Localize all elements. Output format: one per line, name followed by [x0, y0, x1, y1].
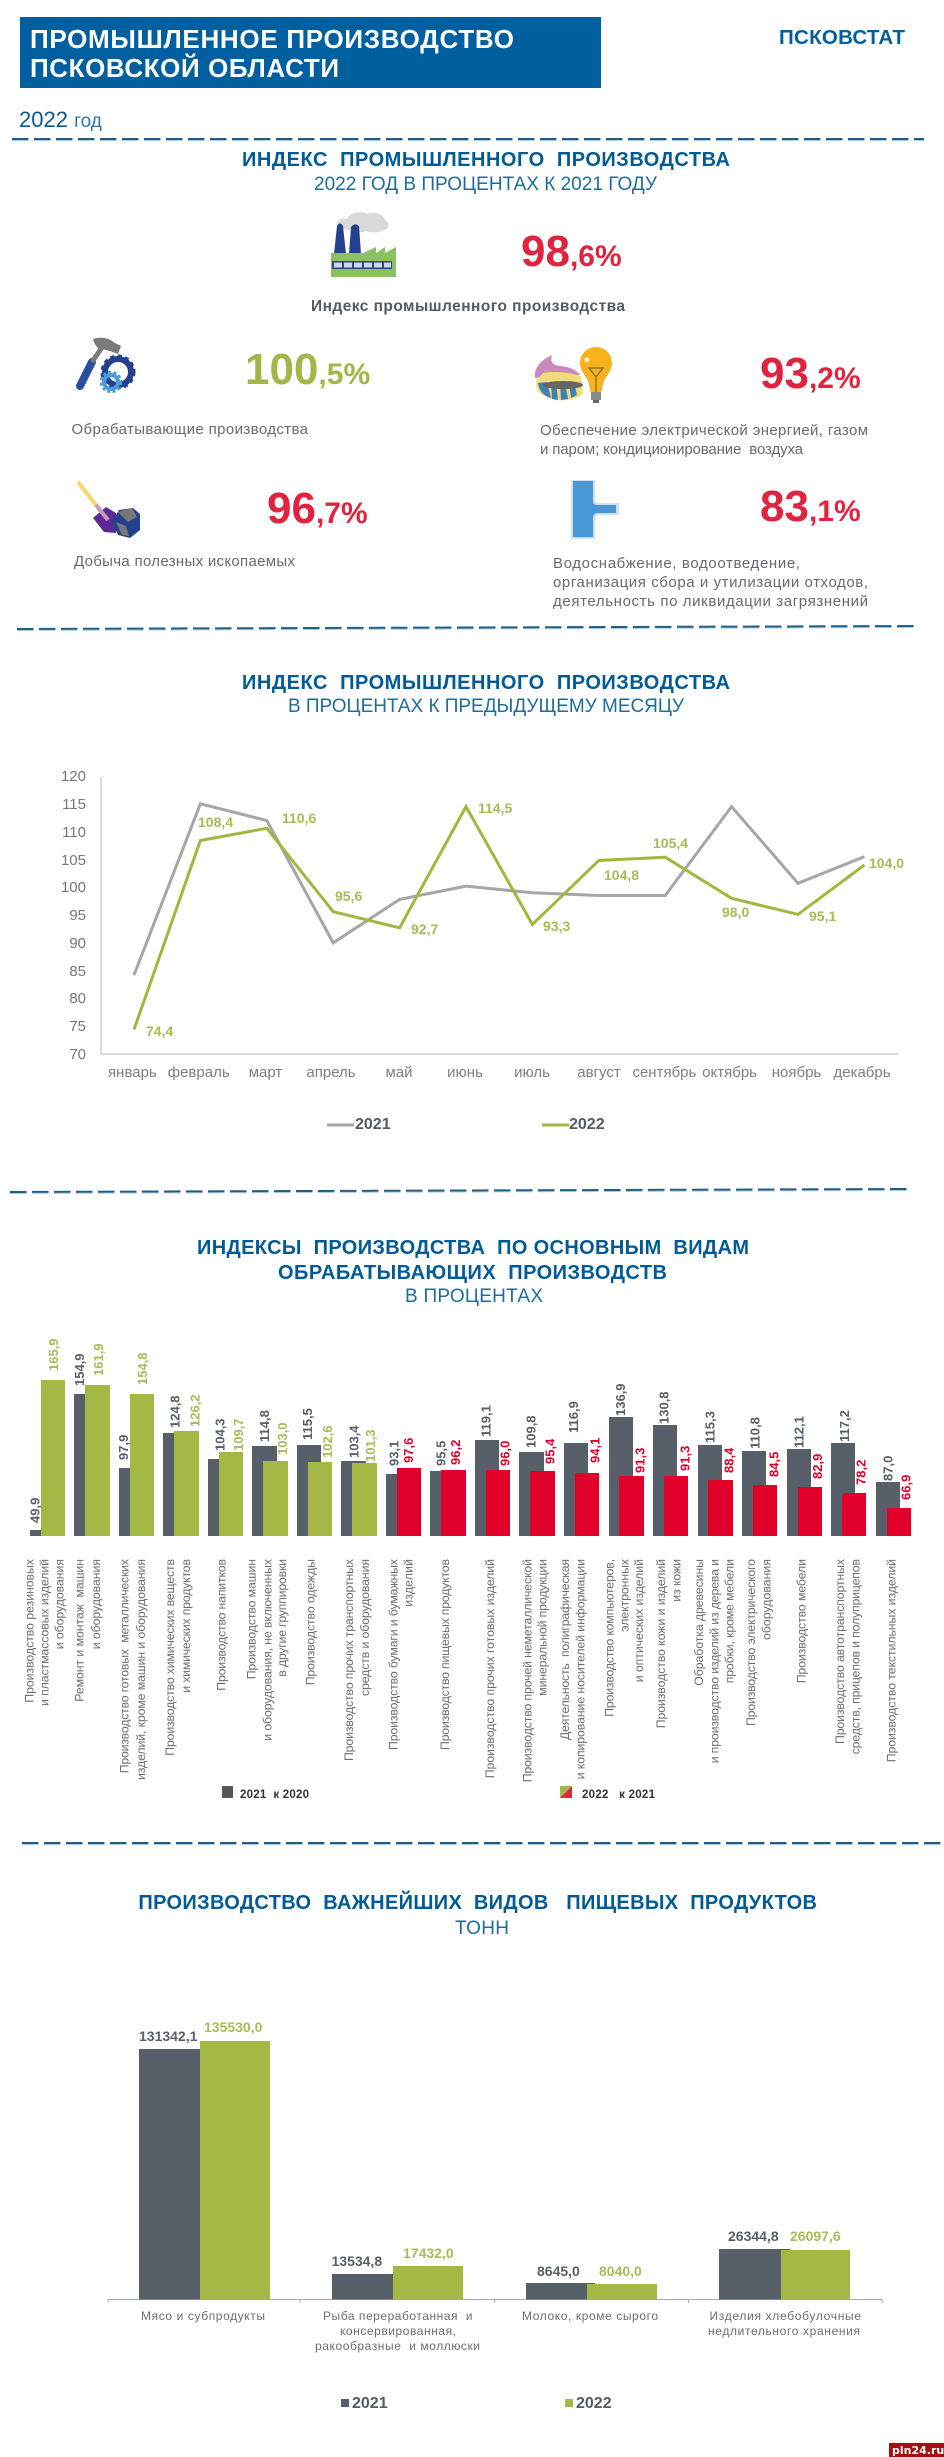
data labels: 2022: 92,7 [411, 921, 438, 937]
title banner: ПСКОВСКОЙ ОБЛАСТИ [30, 53, 339, 83]
bar values: 2021 to 2020: 114,8 [257, 1410, 272, 1442]
category labels: Производство кожи и изделий [654, 1559, 668, 1728]
category labels: Производство прочих готовых изделий [483, 1559, 497, 1778]
label: energy: Обеспечение электрической энергией, газом [540, 422, 868, 439]
category labels: Производство прочих транспортных [342, 1558, 356, 1761]
label: total index: Индекс промышленного производства [311, 298, 625, 315]
category labels: средств и оборудования [358, 1559, 372, 1696]
watermark: pln24.ru [892, 2444, 944, 2457]
x-axis labels: ноябрь [772, 1064, 821, 1081]
x-axis labels: апрель [306, 1064, 356, 1081]
icon: hammer and gears [80, 338, 134, 392]
panel: food production [108, 1890, 882, 2412]
y-axis labels: 105 [61, 852, 86, 869]
category labels: средств, прицепов и полуприцепов [849, 1559, 863, 1754]
category labels: Молоко, кроме сырого [522, 2309, 658, 2323]
heading: manufacturing types: ИНДЕКСЫ ПРОИЗВОДСТВА ПО ОСНОВНЫМ ВИДАМ [197, 1237, 749, 1259]
category labels: Производство готовых металлических [117, 1558, 131, 1773]
category labels: из кожи [670, 1559, 684, 1602]
bar values: 2021 to 2020: 115,3 [702, 1411, 718, 1443]
category labels: и химических продуктов [179, 1559, 193, 1693]
bar values: 2022 to 2021: 84,5 [766, 1452, 782, 1477]
category labels: Деятельность полиграфическая [558, 1559, 572, 1740]
y-axis labels: 85 [69, 963, 86, 980]
bar values: 2022 to 2021: 102,6 [320, 1425, 335, 1458]
panel: monthly index [61, 672, 904, 1133]
legend [222, 1786, 656, 1801]
panel: manufacturing types [22, 1237, 914, 1801]
subheading: manufacturing types: В ПРОЦЕНТАХ [405, 1286, 543, 1307]
x-axis labels: декабрь [833, 1064, 891, 1081]
y-axis labels: 120 [61, 768, 86, 785]
bar values: 2022 to 2021: 103,0 [275, 1422, 290, 1455]
bar values: 2022 to 2021: 91,3 [632, 1448, 648, 1473]
x-axis labels: июнь [447, 1064, 483, 1081]
value: energy: 93,2% [760, 349, 861, 398]
x-axis labels: август [577, 1064, 621, 1081]
legend [327, 1116, 605, 1133]
category labels: Производство химических веществ [163, 1559, 177, 1756]
bar values: 2021 to 2020: 119,1 [478, 1405, 494, 1437]
y-axis labels: 95 [69, 907, 86, 924]
category labels: Производство одежды [304, 1559, 318, 1685]
x-axis labels: июль [514, 1064, 550, 1081]
bar values: 2021 to 2020: 124,8 [168, 1395, 182, 1428]
category labels [141, 2309, 861, 2353]
data labels: 2022: 105,4 [653, 835, 688, 851]
data labels: 2022: 104,0 [869, 855, 904, 871]
category labels: Производство бумаги и бумажных [386, 1558, 400, 1750]
bar values: 2022 to 2021: 95,4 [542, 1438, 558, 1464]
bar values: 2022 to 2021: 154,8 [135, 1352, 150, 1385]
legend: 2021 [352, 2395, 388, 2412]
category labels: и оборудования [89, 1559, 103, 1649]
x-axis labels: январь [108, 1064, 157, 1081]
bar values: 2022 to 2021: 126,2 [188, 1394, 202, 1427]
bar values: 2021 to 2020 [28, 1353, 896, 1523]
label: mining: Добыча полезных ископаемых [74, 553, 296, 570]
legend: 2022 к 2021 [582, 1789, 656, 1801]
category labels: оборудования [760, 1559, 774, 1640]
bar values: 2021 to 2020: 117,2 [837, 1410, 852, 1442]
bar values: 2021 to 2020: 130,8 [656, 1391, 672, 1424]
x-axis labels: март [249, 1064, 282, 1081]
bar values: 2021 to 2020: 109,8 [524, 1415, 538, 1448]
line: 2021 [134, 804, 864, 975]
bar values: 2021 to 2020: 95,5 [434, 1441, 448, 1466]
y-axis labels: 100 [61, 879, 86, 896]
value: mining: 96,7% [267, 484, 368, 533]
category labels: консервированная, [340, 2324, 456, 2338]
label: manufacturing: Обрабатывающие производства [72, 421, 309, 438]
icon: gas flame and light bulb [535, 347, 612, 403]
category labels: недлительного хранения [708, 2324, 860, 2338]
year label: 2022 год [19, 107, 102, 132]
data labels: 2022: 95,6 [335, 888, 362, 904]
x-axis labels [108, 1064, 891, 1081]
heading: monthly index: ИНДЕКС ПРОМЫШЛЕННОГО ПРОИЗВОДСТВА [242, 672, 730, 694]
category labels: Производство резиновых [22, 1558, 36, 1703]
category labels [22, 1558, 899, 1782]
category labels: Ремонт и монтаж машин [72, 1559, 86, 1702]
legend [341, 2395, 612, 2412]
y-axis labels [61, 768, 86, 1063]
label: water supply: организация сбора и утилизации отходов, [553, 574, 868, 591]
category labels: Производство электрического [744, 1559, 758, 1726]
category labels: и производство изделий из дерева и [707, 1559, 721, 1763]
icon: shovel and ore [78, 482, 140, 538]
value: manufacturing: 100,5% [245, 345, 370, 394]
category labels: Изделия хлебобулочные [710, 2309, 861, 2323]
category labels: Производство автотранспортных [833, 1558, 847, 1744]
category labels: Производство компьютеров, [602, 1559, 616, 1717]
bar values: 2022 to 2021: 78,2 [854, 1460, 868, 1485]
y-axis labels: 110 [62, 824, 86, 841]
bar values: 2022 to 2021: 66,9 [898, 1475, 914, 1500]
title banner [20, 17, 601, 88]
category labels: и оборудования, не включенных [261, 1558, 275, 1741]
category labels: Производство пищевых продуктов [438, 1559, 452, 1750]
bar values: 2022 to 2021: 97,6 [401, 1438, 416, 1463]
data labels: 2022: 74,4 [146, 1023, 173, 1039]
bar values [139, 2019, 841, 2279]
bar values: 2021 to 2020: 154,9 [72, 1353, 87, 1386]
bar values: 2022 to 2021: 88,4 [722, 1447, 736, 1473]
y-axis labels: 80 [69, 990, 86, 1007]
bar values: 2022 to 2021: 101,3 [363, 1429, 378, 1462]
legend: 2021 [355, 1116, 391, 1133]
bar values: 2022 to 2021: 82,9 [810, 1454, 825, 1479]
category labels: электронных [617, 1558, 631, 1632]
data labels: 2022: 104,8 [604, 867, 639, 883]
legend: 2021 к 2020 [240, 1789, 309, 1801]
bar values: 2022 to 2021: 96,0 [498, 1441, 512, 1466]
category labels: Производство машин [245, 1559, 259, 1679]
legend: 2022 [569, 1116, 605, 1133]
y-axis labels: 75 [69, 1018, 86, 1035]
category labels: Обработка древесины [692, 1559, 706, 1686]
title banner: ПРОМЫШЛЕННОЕ ПРОИЗВОДСТВО [30, 24, 514, 54]
bar values: 2022 to 2021 [46, 1338, 914, 1500]
bar values: 2021 to 2020: 87,0 [880, 1456, 896, 1481]
bar values: 8645,0 [537, 2263, 580, 2279]
value: water supply: 83,1% [760, 482, 861, 531]
line chart [61, 768, 904, 1133]
bar values: 2021 to 2020: 115,5 [300, 1408, 315, 1440]
bar values: 2021 to 2020: 103,4 [346, 1425, 362, 1458]
data labels: 2022: 98,0 [722, 904, 749, 920]
category labels: и пластмассовых изделий [37, 1559, 51, 1706]
line: 2022 [134, 807, 864, 1030]
heading: annual index: ИНДЕКС ПРОМЫШЛЕННОГО ПРОИЗВОДСТВА [242, 149, 730, 171]
bar values: 2022 to 2021: 165,9 [46, 1338, 61, 1371]
y-axis labels: 90 [69, 935, 86, 952]
source label: Псковстат: ПСКОВСТАТ [779, 26, 905, 49]
x-axis labels: февраль [168, 1064, 230, 1081]
bar values: 2022 to 2021: 96,2 [448, 1440, 463, 1465]
category labels: Производство прочей неметаллической [520, 1559, 534, 1782]
heading: food production: ПРОИЗВОДСТВО ВАЖНЕЙШИХ ВИДОВ ПИЩЕВЫХ ПРОДУКТОВ [138, 1890, 817, 1914]
bar chart: manufacturing indices [22, 1338, 914, 1801]
bar values: 135530,0 [204, 2019, 263, 2035]
x-axis labels: сентябрь [632, 1064, 697, 1081]
label: water supply: Водоснабжение, водоотведение, [553, 555, 800, 572]
subheading: annual index: 2022 ГОД В ПРОЦЕНТАХ К 2021 ГОДУ [314, 174, 658, 195]
category labels: Рыба переработанная и [323, 2309, 472, 2323]
label: water supply [553, 555, 868, 610]
icon: water pipe [571, 480, 619, 539]
bar values: 26097,6 [790, 2228, 841, 2244]
label: energy [540, 422, 868, 458]
category labels: и оптических изделий [632, 1559, 646, 1682]
bar values: 2021 to 2020: 97,9 [116, 1435, 131, 1460]
category labels: изделий, кроме машин и оборудования [134, 1559, 148, 1780]
data labels: 2022: 93,3 [543, 918, 570, 934]
bar values: 2022 to 2021: 109,7 [231, 1418, 246, 1451]
category labels: ракообразные и моллюски [315, 2339, 480, 2353]
bar values: 26344,8 [728, 2228, 779, 2244]
data labels: 2022: 114,5 [478, 800, 512, 816]
bar values: 13534,8 [332, 2253, 382, 2269]
bar values: 2021 to 2020: 136,9 [613, 1383, 628, 1416]
bar values: 131342,1 [139, 2028, 198, 2044]
subheading: food production: ТОНН [455, 1918, 509, 1939]
x-axis labels: октябрь [702, 1064, 757, 1081]
label: water supply: деятельность по ликвидации загрязнений [553, 593, 868, 610]
category labels: и копирование носителей информации [574, 1559, 588, 1779]
category labels: пробки, кроме мебели [722, 1559, 736, 1683]
category labels: в другие группировки [275, 1559, 289, 1677]
category labels: Мясо и субпродукты [141, 2309, 265, 2323]
data labels: 2022: 110,6 [282, 810, 316, 826]
category labels: Производство напитков [215, 1559, 229, 1691]
legend: 2022 [576, 2395, 612, 2412]
category labels: Производство мебели [795, 1559, 809, 1683]
bar values: 2022 to 2021: 91,3 [678, 1446, 692, 1471]
y-axis labels: 115 [62, 796, 86, 813]
label: energy: и паром; кондиционирование воздуха [540, 441, 804, 458]
bar values: 2021 to 2020: 110,8 [748, 1417, 762, 1449]
data labels: 2022 [146, 800, 904, 1039]
value: total index: 98,6% [521, 227, 622, 276]
icon: factory [331, 212, 396, 277]
bar values: 2021 to 2020: 104,3 [212, 1418, 228, 1451]
y-axis labels: 70 [69, 1046, 86, 1063]
x-axis labels: май [385, 1064, 413, 1081]
data labels: 2022: 95,1 [809, 908, 836, 924]
heading: manufacturing types [197, 1237, 749, 1284]
bar values: 17432,0 [403, 2245, 454, 2261]
bar values: 2021 to 2020: 112,1 [792, 1416, 806, 1448]
data labels: 2022: 108,4 [198, 814, 233, 830]
category labels: минеральной продукции [536, 1559, 550, 1696]
heading: manufacturing types: ОБРАБАТЫВАЮЩИХ ПРОИЗВОДСТВ [278, 1262, 667, 1284]
category labels: изделий [401, 1559, 415, 1607]
bar chart: food products [108, 2019, 882, 2412]
bar values: 2021 to 2020: 49,9 [28, 1498, 42, 1523]
category labels: Производство текстильных изделий [885, 1559, 899, 1762]
bar values: 8040,0 [599, 2263, 642, 2279]
category labels: и оборудования [52, 1559, 66, 1649]
bar values: 2022 to 2021: 161,9 [91, 1343, 106, 1376]
bar values: 2021 to 2020: 93,1 [386, 1441, 402, 1466]
subheading: monthly index: В ПРОЦЕНТАХ К ПРЕДЫДУЩЕМУ МЕСЯЦУ [288, 696, 685, 717]
bar values: 2022 to 2021: 94,1 [588, 1438, 602, 1463]
panel: annual index [72, 149, 868, 610]
bar values: 2021 to 2020: 116,9 [566, 1401, 581, 1433]
